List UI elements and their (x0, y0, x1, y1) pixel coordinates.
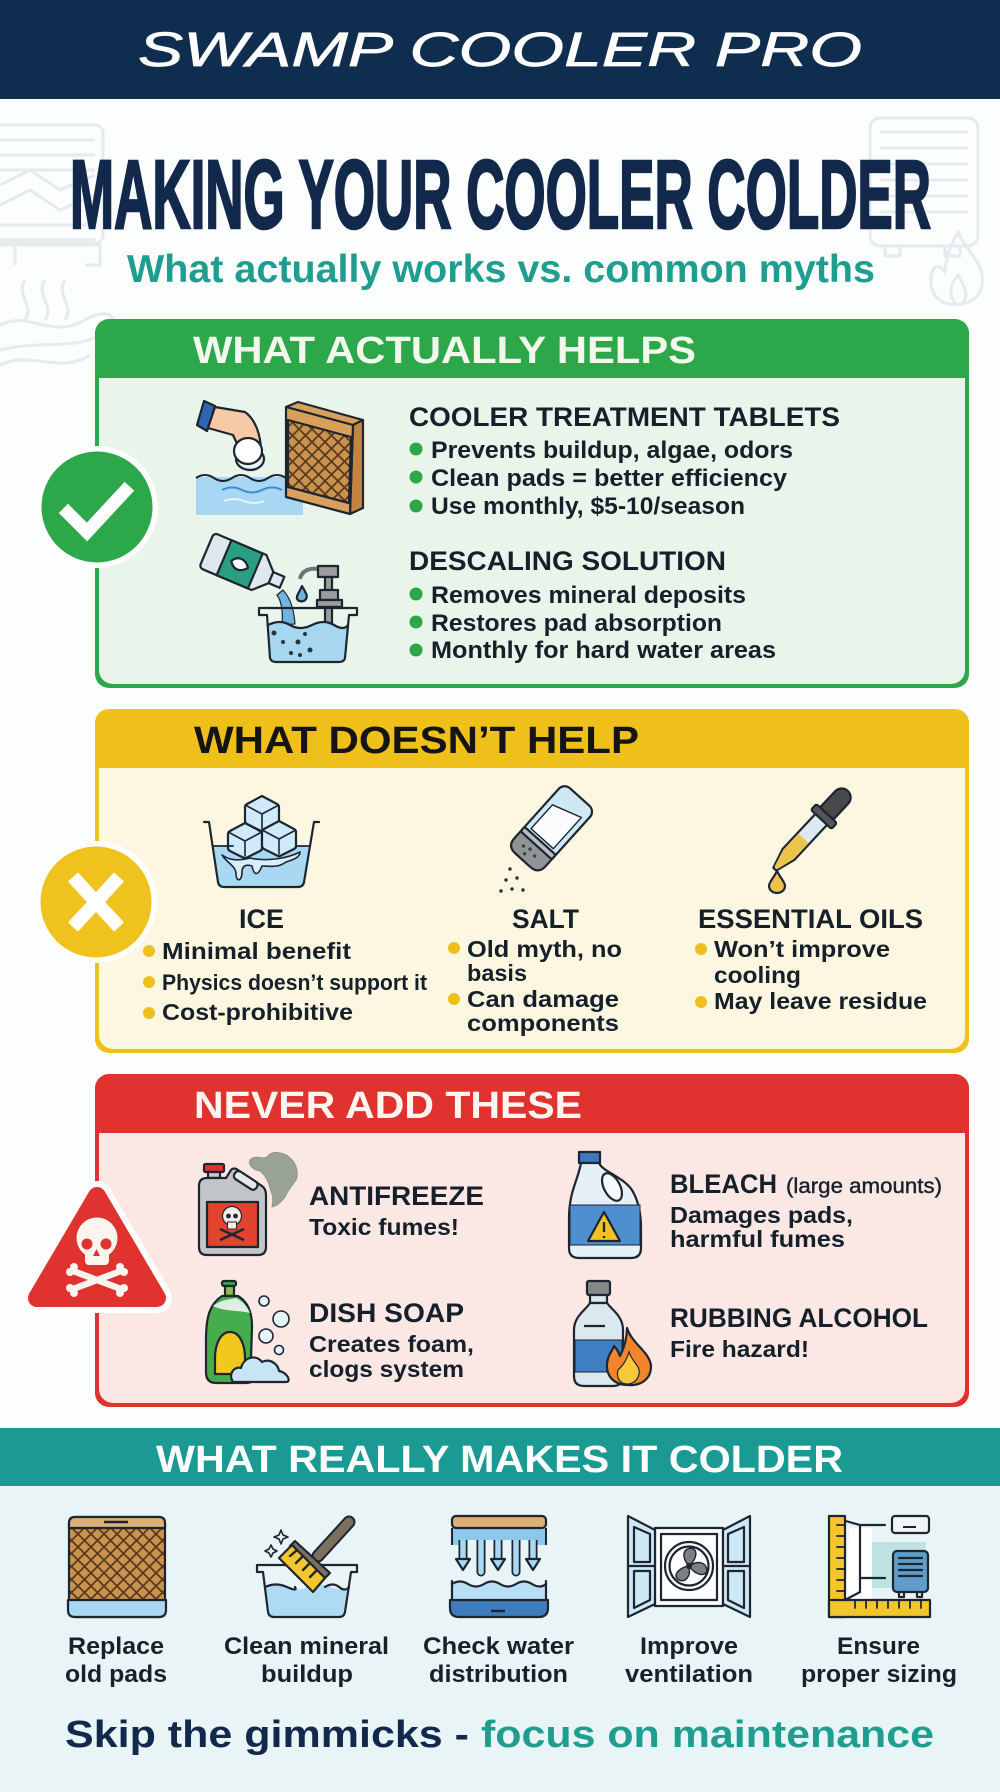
label: clean mineral buildup: Clean mineral (224, 1633, 389, 1660)
text: antifreeze: ANTIFREEZE (309, 1181, 484, 1211)
icon: rubbing alcohol bottle with flame (574, 1281, 651, 1386)
icon: green check badge (36, 446, 158, 568)
heading: what doesn't help: WHAT DOESN’T HELP (194, 720, 639, 762)
panel: never add these (95, 1074, 969, 1407)
top brand bar (0, 0, 1000, 99)
heading: descaling solution: DESCALING SOLUTION (409, 546, 726, 576)
label: salt: SALT (512, 904, 579, 934)
icon: tablet dropped in water beside cooler pad (196, 401, 363, 515)
icon: window with fan (628, 1516, 750, 1617)
background watermark icons (0, 118, 982, 365)
subtitle: What actually works vs. common myths (127, 248, 875, 291)
list: salt points (448, 936, 622, 1036)
label: clean mineral buildup (224, 1633, 389, 1688)
top brand bar: SWAMP COOLER PRO (138, 24, 862, 77)
list: tablet benefits: Prevents buildup, algae, odors (431, 437, 793, 464)
text: rubbing alcohol: RUBBING ALCOHOL (670, 1303, 928, 1333)
list: descaling benefits: Monthly for hard water areas (431, 637, 776, 664)
list: salt points: Can damage (467, 986, 619, 1012)
list: essential oil points: Won’t improve (714, 936, 890, 962)
text: antifreeze: Toxic fumes! (309, 1214, 459, 1240)
list: ice points: Physics doesn’t support it (162, 970, 428, 995)
heading: what actually helps: WHAT ACTUALLY HELPS (193, 330, 696, 372)
panel: what actually helps (95, 319, 969, 688)
icon: cleaning brush in tub (257, 1522, 357, 1617)
list: essential oil points: May leave residue (714, 988, 927, 1014)
list: descaling benefits: Restores pad absorption (431, 610, 722, 637)
icon: ice in bowl (204, 796, 319, 887)
label: improve ventilation (625, 1633, 753, 1688)
icon: bleach bottle (569, 1152, 641, 1258)
label: clean mineral buildup: buildup (261, 1661, 353, 1688)
icon: essential oil dropper (765, 781, 858, 893)
list: descaling benefits: Removes mineral deposits (431, 582, 746, 609)
list: essential oil points (695, 936, 927, 1014)
text: dish soap: Creates foam, (309, 1331, 474, 1357)
icon: antifreeze jug with fumes (199, 1153, 297, 1255)
icon: room sizing with ruler (829, 1516, 930, 1617)
label: check water distribution: Check water (423, 1633, 574, 1660)
label: check water distribution: distribution (429, 1661, 568, 1688)
label: essential oils: ESSENTIAL OILS (698, 904, 923, 934)
list: tablet benefits (410, 437, 793, 520)
text: bleach: harmful fumes (670, 1226, 845, 1252)
list: tablet benefits: Use monthly, $5-10/season (431, 493, 745, 520)
label: replace old pads: Replace (68, 1633, 164, 1660)
text: bleach: (large amounts) (786, 1175, 942, 1198)
text: bleach: Damages pads, (670, 1202, 853, 1228)
list: salt points: Old myth, no (467, 936, 622, 962)
list: ice points: Cost-prohibitive (162, 999, 353, 1025)
label: replace old pads: old pads (65, 1661, 167, 1688)
list: ice points (143, 938, 428, 1025)
list: salt points: basis (467, 960, 527, 986)
label: replace old pads (65, 1633, 167, 1688)
label: ensure proper sizing: proper sizing (801, 1661, 957, 1688)
text: bleach: BLEACH (670, 1169, 777, 1199)
list: essential oil points: cooling (714, 962, 801, 988)
text: dish soap: clogs system (309, 1356, 464, 1382)
heading: never add these: NEVER ADD THESE (194, 1085, 582, 1127)
icon: salt shaker (499, 783, 595, 893)
panel: what doesn't help (95, 709, 969, 1053)
icon: red skull warning triangle (37, 1196, 157, 1298)
icon: yellow x badge (35, 841, 157, 963)
heading: cooler treatment tablets: COOLER TREATMENT TABLETS (409, 402, 840, 432)
icon: descaling solution poured into tub (199, 533, 357, 662)
text: dish soap (309, 1298, 474, 1382)
list: descaling benefits (410, 582, 776, 664)
label: ice: ICE (239, 904, 284, 934)
icon: water distribution (450, 1516, 548, 1617)
list: ice points: Minimal benefit (162, 938, 351, 964)
heading: what really makes it colder: WHAT REALLY MAKES IT COLDER (156, 1439, 843, 1481)
footer tagline (65, 1714, 934, 1756)
text: antifreeze (309, 1181, 484, 1240)
text: rubbing alcohol (670, 1303, 928, 1362)
footer tagline: Skip the gimmicks - (65, 1714, 469, 1756)
list: tablet benefits: Clean pads = better efficiency (431, 465, 788, 492)
text: rubbing alcohol: Fire hazard! (670, 1336, 809, 1362)
label: ensure proper sizing: Ensure (837, 1633, 920, 1660)
text: bleach (670, 1169, 942, 1252)
icon: replace pad (68, 1517, 166, 1617)
label: check water distribution (423, 1633, 574, 1688)
label: improve ventilation: Improve (640, 1633, 738, 1660)
footer tagline: focus on maintenance (481, 1714, 934, 1756)
list: salt points: components (467, 1010, 619, 1036)
label: ensure proper sizing (801, 1633, 957, 1688)
panel: what really makes it colder (0, 1428, 1000, 1792)
icon: dish soap bottle with bubbles (206, 1281, 289, 1383)
text: dish soap: DISH SOAP (309, 1298, 464, 1328)
label: improve ventilation: ventilation (625, 1661, 753, 1688)
